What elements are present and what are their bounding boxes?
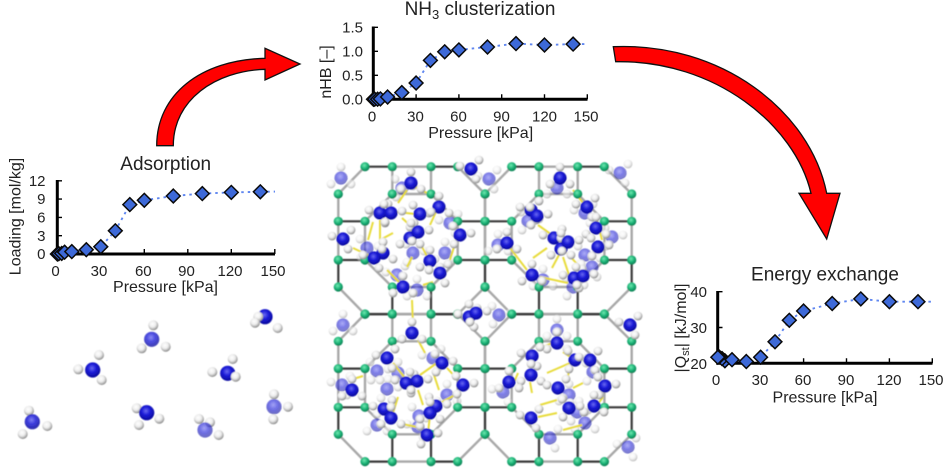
framework nodes (334, 162, 636, 466)
x tick labels: 0 (51, 263, 60, 280)
y axis label: Qst: st (680, 347, 692, 356)
y tick labels: 6 (37, 210, 46, 226)
y axis label: Qst: | [kJ/mol] (673, 284, 690, 347)
y axis label: loading: Loading [mol/kg] (8, 158, 24, 275)
x tick labels: 30 (407, 109, 424, 126)
x axis label: pressure: Pressure [kPa] (428, 125, 533, 142)
x tick labels: 60 (135, 263, 152, 280)
x tick labels: 150 (573, 109, 599, 126)
y tick labels: 0.0 (342, 92, 363, 108)
x tick labels: 120 (532, 109, 557, 126)
zeolite framework with clustered NH3 (327, 156, 642, 466)
panel: energy exchange chart (673, 265, 944, 407)
x tick labels: 150 (260, 263, 286, 280)
framework bonds (338, 167, 632, 462)
molecule 1 (250, 309, 283, 333)
data curve: nHB (374, 44, 588, 99)
data curve: loading (57, 192, 275, 254)
background translucent NH3 molecules (327, 160, 640, 461)
panel: NH3 clusterization chart (318, 0, 599, 142)
x tick labels (368, 109, 599, 126)
axes and ticks (718, 291, 932, 363)
axes and ticks (57, 180, 275, 254)
y tick labels (29, 173, 46, 263)
y tick labels (342, 20, 363, 108)
y tick labels: 12 (29, 173, 46, 190)
y tick labels: 1.0 (342, 44, 363, 60)
y tick labels: 9 (37, 191, 46, 208)
molecule 8 (266, 389, 293, 424)
y tick labels: 40 (690, 284, 707, 301)
molecule 2 (137, 320, 171, 353)
heading: energy exchange: Energy exchange (751, 265, 899, 286)
heading: adsorption: Adsorption (120, 154, 211, 175)
x tick labels: 120 (876, 372, 902, 389)
molecule 4 (207, 354, 241, 382)
heading: NH3 clusterization: 3 (432, 7, 439, 22)
x tick labels: 90 (838, 372, 854, 389)
x tick labels: 0 (368, 109, 376, 126)
y tick labels: 3 (37, 228, 46, 245)
hydrogen bonds (350, 187, 603, 433)
data markers: nHB (367, 37, 580, 106)
x tick labels: 30 (91, 263, 107, 280)
molecule 6 (132, 403, 164, 430)
x axis label: pressure: Pressure [kPa] (113, 279, 218, 296)
molecule 3 (73, 350, 107, 385)
arrow: adsorption to clusterization (157, 48, 300, 146)
x tick labels: 60 (795, 372, 811, 389)
data markers: loading (50, 185, 267, 261)
x tick labels: 120 (217, 263, 243, 280)
panel: adsorption chart (8, 154, 286, 296)
molecule 7 (194, 414, 224, 440)
y tick labels (690, 284, 707, 373)
axes and ticks (373, 26, 588, 99)
x tick labels: 30 (752, 372, 768, 389)
x tick labels (51, 263, 286, 280)
x tick labels: 150 (918, 372, 944, 389)
y tick labels: 30 (690, 320, 707, 337)
isolated NH3 molecules (18, 309, 293, 440)
y axis label: Qst: |Q (673, 356, 690, 372)
y axis label: nHB: nHB [–] (318, 45, 335, 99)
x tick labels (712, 372, 944, 389)
y tick labels: 0.5 (342, 68, 363, 84)
x axis label: pressure: Pressure [kPa] (773, 390, 877, 407)
y tick labels: 1.5 (342, 20, 363, 36)
x tick labels: 90 (493, 109, 510, 126)
x tick labels: 0 (712, 372, 720, 389)
x tick labels: 90 (178, 263, 195, 280)
data markers: Qst (711, 292, 925, 368)
arrow: clusterization to energy exchange (613, 46, 840, 239)
x tick labels: 60 (450, 109, 467, 126)
y tick labels: 0 (37, 246, 46, 263)
y tick labels: 20 (690, 356, 707, 373)
data curve: Qst (718, 299, 932, 362)
foreground NH3 molecules (328, 156, 642, 448)
molecule 5 (18, 406, 52, 439)
